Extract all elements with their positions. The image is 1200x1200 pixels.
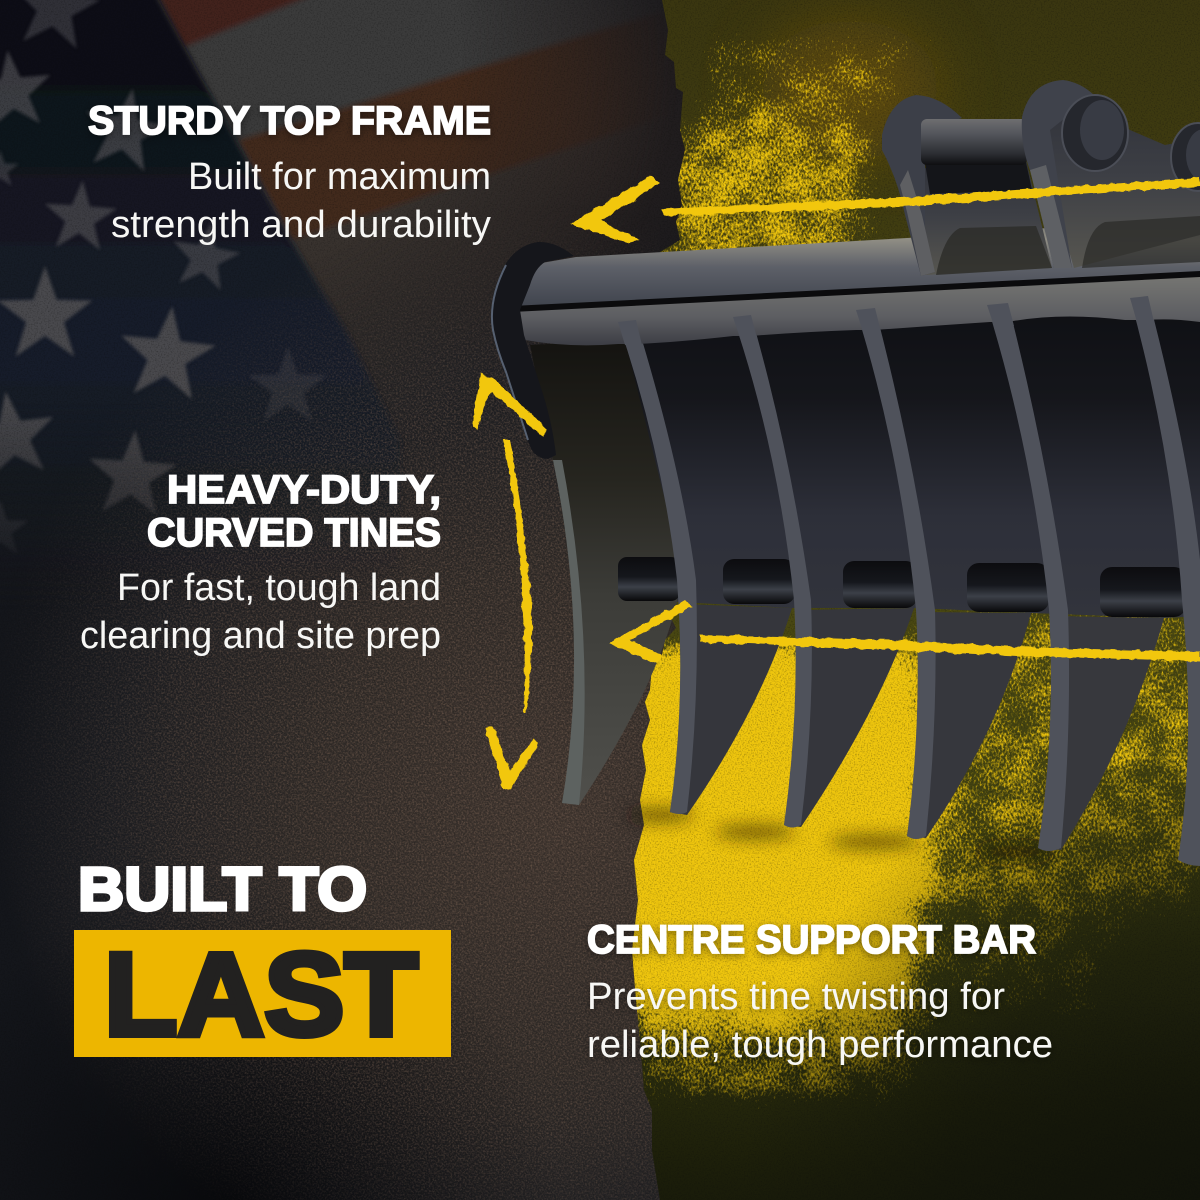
arrow: curved tines double-headed xyxy=(472,373,548,790)
olive base xyxy=(620,0,1200,1200)
line 1: Built for maximum xyxy=(188,156,491,198)
arrow: top frame xyxy=(570,176,1200,243)
heading: CENTRE SUPPORT BAR xyxy=(587,918,1036,962)
line 2: clearing and site prep xyxy=(80,615,441,657)
arch right xyxy=(1082,216,1200,268)
brown speckled texture xyxy=(16,244,660,1200)
background: olive and yellow grunge right xyxy=(600,0,1200,1200)
black seam xyxy=(512,271,1200,312)
text block: centre support bar xyxy=(587,918,1053,1066)
back plate xyxy=(600,280,1200,618)
line 1: For fast, tough land xyxy=(117,567,441,609)
yellow box xyxy=(74,930,451,1057)
heading: STURDY TOP FRAME xyxy=(88,99,491,143)
line 2: reliable, tough performance xyxy=(587,1024,1053,1066)
centre support bar segments xyxy=(618,557,1186,617)
second pin boss xyxy=(1171,123,1200,191)
right corner darkening xyxy=(774,755,1200,1200)
last text: LAST xyxy=(104,929,418,1061)
headline: built to: BUILT TO xyxy=(78,855,367,923)
rake bucket xyxy=(491,80,1200,866)
tine shadows on ground xyxy=(626,808,1055,859)
callout arrows xyxy=(472,176,1200,790)
headline: last badge xyxy=(74,929,451,1061)
shadow under pin xyxy=(925,158,1032,194)
orange tint top xyxy=(760,20,940,160)
right mount plate xyxy=(1022,80,1094,268)
bottom darkening xyxy=(638,1011,924,1200)
left mount plate xyxy=(882,95,962,276)
pin boss xyxy=(1062,95,1128,171)
american flag backdrop xyxy=(0,0,625,550)
top frame bar xyxy=(512,217,1200,308)
top pin xyxy=(921,119,1027,165)
text block: heavy-duty curved tines xyxy=(80,468,441,657)
mount strip right xyxy=(1030,165,1072,268)
left end plate xyxy=(491,242,574,459)
tine ribs xyxy=(618,296,1200,866)
right mount body xyxy=(1030,84,1200,268)
line 2: strength and durability xyxy=(111,204,491,246)
flag stars xyxy=(0,0,328,554)
yellow paint patches xyxy=(600,20,1200,1110)
text block: sturdy top frame xyxy=(88,99,491,246)
heading line 2: CURVED TINES xyxy=(147,511,441,555)
first tine blade xyxy=(530,340,680,805)
heading line 1: HEAVY-DUTY, xyxy=(167,468,441,512)
arch cut-outs xyxy=(936,226,1052,275)
arrow: centre support bar xyxy=(610,600,1200,664)
mount strip left xyxy=(900,170,935,276)
line 1: Prevents tine twisting for xyxy=(587,976,1005,1018)
left curved side strip xyxy=(553,460,585,805)
tine blades xyxy=(670,604,1164,850)
mount body between plates xyxy=(908,156,1052,275)
under-bar scalloped band xyxy=(512,274,1200,345)
tine rib tops over band xyxy=(618,296,1154,345)
